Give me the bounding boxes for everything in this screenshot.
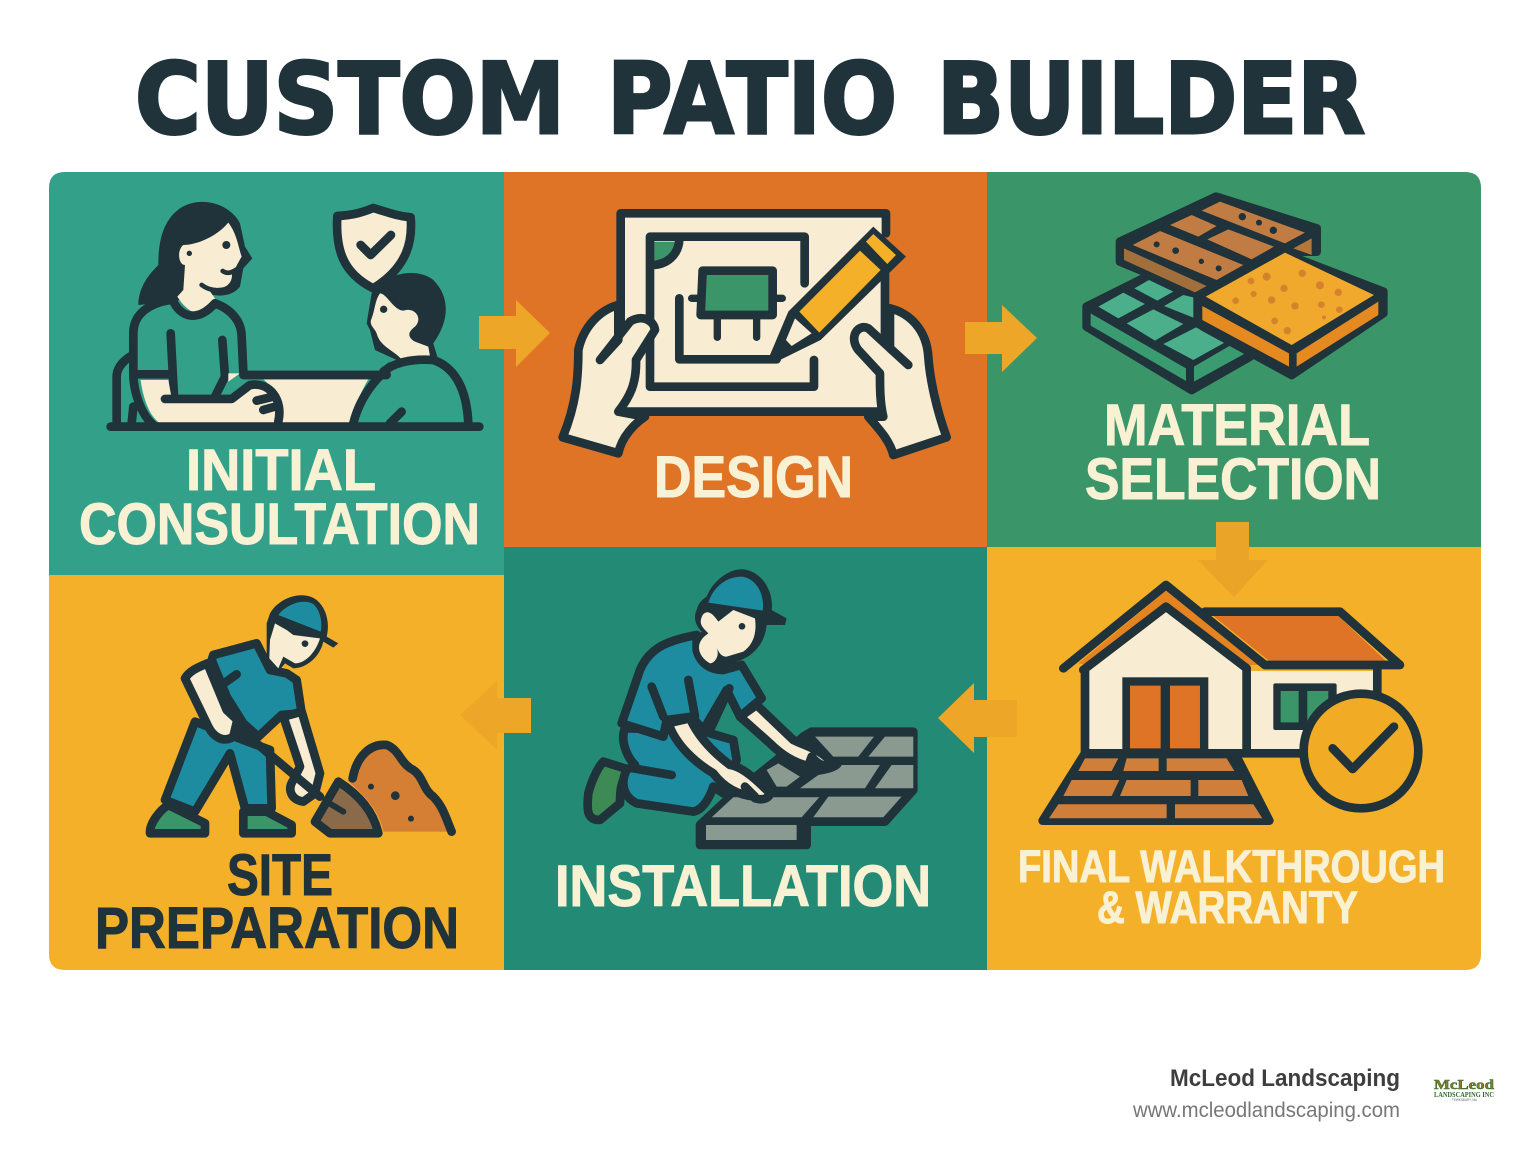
panel background (504, 172, 987, 547)
footer brand text: McLeod Landscaping (1170, 1065, 1400, 1092)
panel: initial consultation (49, 172, 504, 575)
heading: initial consultation: INITIAL (186, 438, 376, 503)
title: BUILDER (937, 43, 1365, 157)
panel: material selection (987, 172, 1481, 547)
logo: McLeod Landscaping Inc: LANDSCAPING INC (1434, 1090, 1494, 1099)
arrow: consultation to design (479, 300, 550, 367)
panel background (49, 575, 504, 970)
panel: installation (504, 547, 987, 970)
panel background (504, 547, 987, 970)
heading: final walkthrough and warranty: & WARRANTY (1097, 882, 1358, 933)
icon: stacked material samples (1087, 197, 1383, 390)
title (135, 43, 1365, 157)
heading: design: DESIGN (654, 445, 853, 510)
heading: initial consultation (79, 438, 480, 557)
arrow: material selection to final walkthrough (1198, 522, 1268, 597)
heading: final walkthrough and warranty: FINAL WALKTHROUGH (1018, 841, 1445, 892)
icon: worker laying pavers (588, 569, 913, 845)
heading: material selection: SELECTION (1085, 447, 1381, 512)
heading: site preparation (95, 843, 459, 961)
heading: material selection (1085, 393, 1381, 512)
icon: consultation between two people (111, 202, 479, 427)
arrow: final walkthrough to installation (938, 683, 1017, 753)
footer brand text: www.mcleodlandscaping.com (1132, 1099, 1400, 1122)
panel: final walkthrough and warranty (987, 547, 1481, 970)
title: CUSTOM (135, 43, 565, 157)
icon: worker digging with shovel (150, 595, 452, 833)
arrow: design to material selection (965, 305, 1037, 372)
logo: McLeod Landscaping Inc: McLeod (1434, 1078, 1494, 1093)
heading: final walkthrough and warranty (1018, 841, 1445, 933)
panel background (987, 547, 1481, 970)
heading: initial consultation: CONSULTATION (79, 492, 480, 557)
heading: installation: INSTALLATION (555, 854, 931, 919)
heading: site preparation: PREPARATION (95, 896, 459, 961)
icon: house with patio and check mark (1043, 585, 1418, 821)
title: PATIO (607, 43, 897, 157)
panel background (987, 172, 1481, 547)
logo: McLeod Landscaping Inc (1434, 1078, 1494, 1102)
panel background (49, 172, 504, 575)
icon: hands holding blueprint with pencil (563, 213, 947, 455)
logo: McLeod Landscaping Inc: TEWKSBURY, MA (1452, 1098, 1478, 1102)
arrow: installation to site preparation (460, 681, 531, 750)
heading: material selection: MATERIAL (1104, 393, 1370, 458)
footer brand text (1132, 1065, 1400, 1122)
panel: site preparation (49, 575, 504, 970)
heading: site preparation: SITE (227, 843, 333, 908)
panel: design (504, 172, 987, 547)
